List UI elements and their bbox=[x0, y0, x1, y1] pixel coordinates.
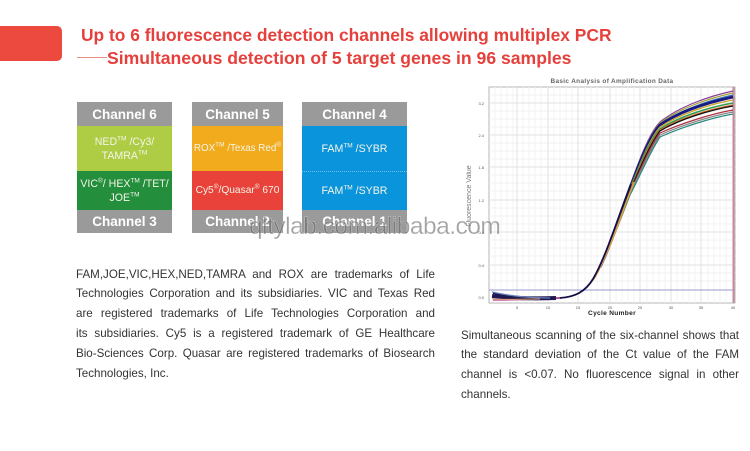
trademark text block: FAM,JOE,VIC,HEX,NED,TAMRA and ROX are trademarks of Life bbox=[76, 268, 435, 281]
trademark text block: Technologies Corporation and its subsidiaries. VIC and Texas Red bbox=[76, 287, 435, 300]
FAM SYBR lower: FAMTM /SYBR bbox=[322, 184, 387, 197]
channel 5 header bbox=[192, 102, 283, 126]
trademark text block: Bio-Sciences Corp. Quasar are registered trademarks of Biosearch bbox=[76, 347, 435, 360]
x axis tick labels: 5 bbox=[516, 305, 519, 310]
ROX Texas Red dyes: ROXTM /Texas Red® bbox=[194, 141, 281, 154]
chart caption text block: the standard deviation of the Ct value of the FAM bbox=[461, 348, 739, 361]
NED Cy3 TAMRA dyes: NEDTM /Cy3/ bbox=[95, 135, 154, 148]
channel 3 footer: Channel 3 bbox=[92, 214, 157, 229]
FAM SYBR upper: FAMTM /SYBR bbox=[322, 142, 387, 154]
trademark text block: are registered trademarks of Life Technologies Corporation and bbox=[76, 307, 435, 320]
chart title: Basic Analysis of Amplification Data bbox=[551, 78, 674, 85]
y axis tick labels: 1.2 bbox=[478, 198, 485, 203]
panel: channels 6 and 3 bbox=[77, 102, 172, 233]
x axis tick labels: 15 bbox=[576, 305, 581, 310]
NED Cy3 TAMRA dyes: TAMRATM bbox=[102, 149, 147, 162]
trademark text block: Technologies, Inc. bbox=[76, 367, 169, 380]
channel 1 footer bbox=[302, 210, 407, 233]
NED Cy3 TAMRA dyes bbox=[77, 126, 172, 171]
title line 1: Up to 6 fluorescence detection channels allowing multiplex PCR bbox=[81, 25, 612, 45]
y axis tick labels: 1.8 bbox=[478, 165, 485, 170]
y axis title: Fluorescence Value bbox=[466, 165, 473, 227]
x axis tick labels: 35 bbox=[699, 305, 704, 310]
trademark text block: its subsidiaries. Cy5 is a registered trademark of GE Healthcare bbox=[76, 327, 435, 340]
y axis tick labels: 0.8 bbox=[478, 230, 485, 235]
FAM SYBR lower bbox=[302, 171, 407, 210]
y axis tick labels: 3.2 bbox=[478, 101, 485, 106]
watermark: qltylab.com.alibaba.com bbox=[249, 213, 500, 240]
chart caption text block: Simultaneous scanning of the six-channel shows that bbox=[461, 329, 739, 342]
y axis tick labels: 0.0 bbox=[478, 295, 485, 300]
channel 4 header bbox=[302, 102, 407, 126]
channel 3 footer bbox=[77, 210, 172, 233]
VIC HEX TET JOE dyes: VIC®/ HEXTM /TET/ bbox=[80, 177, 169, 190]
chart caption text block: channels. bbox=[461, 388, 511, 401]
x axis tick labels: 40 bbox=[731, 305, 736, 310]
right edge marker bbox=[732, 87, 734, 303]
y axis tick labels bbox=[478, 101, 485, 300]
x axis tick labels: 20 bbox=[608, 305, 613, 310]
channel 5 header: Channel 5 bbox=[205, 106, 270, 122]
Cy5 Quasar dyes bbox=[192, 171, 283, 210]
VIC HEX TET JOE dyes bbox=[77, 171, 172, 210]
Cy5 Quasar dyes: Cy5®/Quasar® 670 bbox=[196, 183, 279, 196]
y axis tick labels: 0.4 bbox=[478, 263, 485, 268]
x axis tick labels: 10 bbox=[546, 305, 551, 310]
channel 2 footer bbox=[192, 210, 283, 233]
plot grid bbox=[489, 87, 735, 303]
channel 6 header bbox=[77, 102, 172, 126]
channel 1 footer: Channel 1 bbox=[322, 214, 387, 229]
trademark text block bbox=[76, 268, 435, 380]
x axis tick labels bbox=[516, 305, 736, 310]
title bbox=[77, 25, 612, 68]
panel: channels 4 and 1 bbox=[302, 102, 407, 233]
panel: channels 5 and 2 bbox=[192, 102, 283, 233]
y axis tick labels: 2.4 bbox=[478, 133, 485, 138]
chart caption text block bbox=[461, 329, 739, 401]
channel 2 footer: Channel 2 bbox=[205, 214, 270, 229]
ROX Texas Red dyes bbox=[192, 126, 283, 171]
threshold line bbox=[489, 289, 735, 291]
channel 4 header: Channel 4 bbox=[322, 106, 387, 122]
VIC HEX TET JOE dyes: JOETM bbox=[110, 191, 140, 204]
amplification curves bbox=[492, 91, 733, 300]
x axis tick labels: 30 bbox=[669, 305, 674, 310]
chart caption text block: channel is <0.07. No fluorescence signal in other bbox=[461, 368, 739, 381]
channel 6 header: Channel 6 bbox=[92, 106, 157, 122]
red header tab bbox=[0, 26, 62, 61]
title line 2 with dash: Simultaneous detection of 5 target genes in 96 samples bbox=[107, 48, 571, 68]
FAM SYBR upper bbox=[302, 126, 407, 171]
amplification chart bbox=[466, 78, 736, 317]
x axis tick labels: 25 bbox=[638, 305, 643, 310]
x axis title: Cycle Number bbox=[588, 310, 636, 317]
